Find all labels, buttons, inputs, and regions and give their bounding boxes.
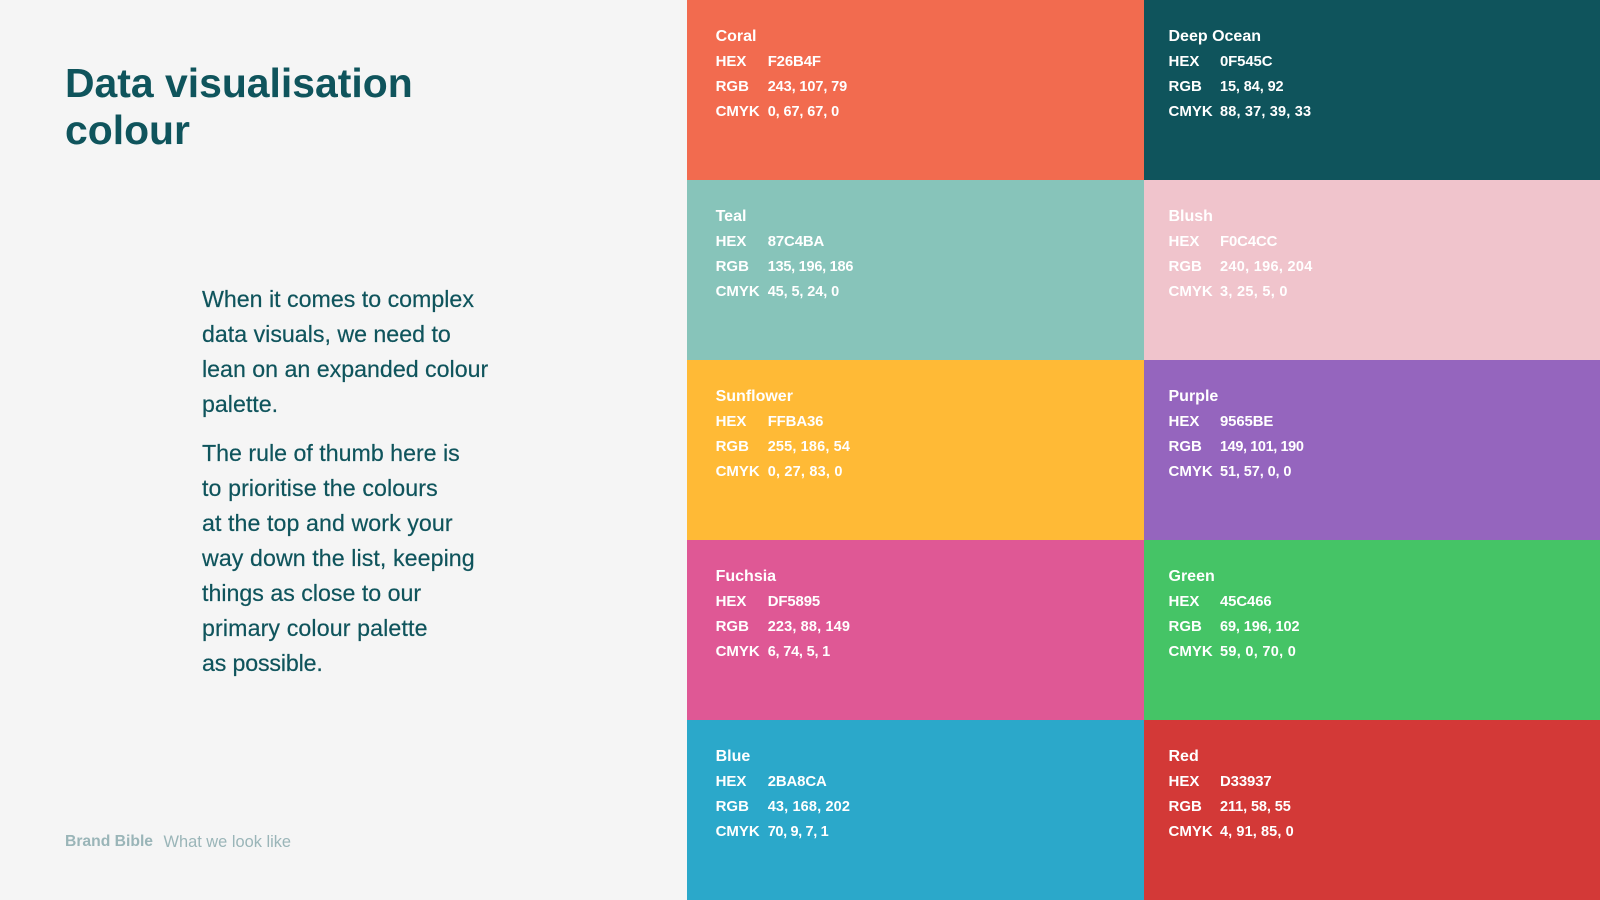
- panel: Coral swatch: CMYK: [716, 103, 760, 120]
- panel: Teal swatch: Teal: [716, 208, 746, 225]
- panel: Fuchsia swatch: [687, 540, 1144, 720]
- panel: Teal swatch: HEX: [716, 233, 746, 250]
- panel: Teal swatch: CMYK: [716, 283, 760, 300]
- panel: Coral swatch: HEX: [716, 53, 746, 70]
- body text: as possible.: [202, 650, 323, 676]
- panel: Purple swatch: [1144, 360, 1600, 540]
- panel: Blush swatch: HEX: [1168, 233, 1199, 250]
- panel: Blue swatch: HEX: [716, 773, 746, 790]
- panel: Sunflower swatch: RGB: [716, 438, 749, 455]
- panel: Purple swatch: CMYK: [1168, 463, 1213, 480]
- title: [65, 60, 413, 153]
- panel: Blue swatch: 70, 9, 7, 1: [768, 824, 828, 840]
- panel: Deep Ocean swatch: 0F545C: [1220, 54, 1272, 70]
- body text: at the top and work your: [202, 510, 453, 536]
- panel: Blush swatch: Blush: [1168, 208, 1213, 225]
- panel: Blush swatch: F0C4CC: [1220, 234, 1277, 250]
- panel: Green swatch: CMYK: [1168, 643, 1213, 660]
- panel: Sunflower swatch: [687, 360, 1144, 540]
- panel: Teal swatch: 45, 5, 24, 0: [768, 284, 839, 300]
- panel: Green swatch: [1144, 540, 1600, 720]
- panel: Red swatch: D33937: [1220, 774, 1272, 790]
- body text: data visuals, we need to: [202, 321, 451, 347]
- panel: Blush swatch: [1144, 180, 1600, 360]
- title: colour: [65, 107, 190, 153]
- panel: Fuchsia swatch: CMYK: [716, 643, 760, 660]
- panel: Blush swatch: CMYK: [1168, 283, 1213, 300]
- panel: Green swatch: 45C466: [1220, 594, 1272, 610]
- panel: Purple swatch: 51, 57, 0, 0: [1220, 464, 1291, 480]
- body text: way down the list, keeping: [202, 545, 475, 571]
- footer: What we look like: [164, 833, 291, 851]
- panel: Sunflower swatch: FFBA36: [768, 414, 823, 430]
- panel: Purple swatch: HEX: [1168, 413, 1199, 430]
- panel: Purple swatch: RGB: [1168, 438, 1202, 455]
- footer: Brand Bible: [65, 833, 153, 850]
- panel: Deep Ocean swatch: HEX: [1168, 53, 1199, 70]
- panel: Sunflower swatch: 0, 27, 83, 0: [768, 464, 843, 480]
- panel: Red swatch: 4, 91, 85, 0: [1220, 824, 1294, 840]
- panel: Deep Ocean swatch: 88, 37, 39, 33: [1220, 104, 1311, 120]
- panel: Coral swatch: [687, 0, 1144, 180]
- panel: Purple swatch: 9565BE: [1220, 414, 1273, 430]
- panel: Fuchsia swatch: DF5895: [768, 594, 820, 610]
- body text: When it comes to complex: [202, 286, 474, 312]
- panel: Blue swatch: 2BA8CA: [768, 774, 827, 790]
- panel: Green swatch: 59, 0, 70, 0: [1220, 644, 1296, 660]
- panel: Deep Ocean swatch: 15, 84, 92: [1220, 79, 1284, 95]
- panel: Blue swatch: [687, 720, 1144, 900]
- panel: Sunflower swatch: Sunflower: [716, 388, 793, 405]
- panel: Deep Ocean swatch: RGB: [1168, 78, 1202, 95]
- panel: Blush swatch: 240, 196, 204: [1220, 259, 1313, 275]
- panel: Coral swatch: 0, 67, 67, 0: [768, 104, 839, 120]
- panel: Deep Ocean swatch: Deep Ocean: [1168, 28, 1261, 45]
- panel: Teal swatch: 87C4BA: [768, 234, 824, 250]
- panel: Fuchsia swatch: Fuchsia: [716, 568, 776, 585]
- body text: to prioritise the colours: [202, 475, 438, 501]
- panel: Red swatch: Red: [1168, 748, 1199, 765]
- panel: Blue swatch: 43, 168, 202: [768, 799, 850, 815]
- panel: Sunflower swatch: CMYK: [716, 463, 760, 480]
- panel: Green swatch: HEX: [1168, 593, 1199, 610]
- panel: Teal swatch: [687, 180, 1144, 360]
- panel: Coral swatch: Coral: [716, 28, 756, 45]
- panel: Green swatch: Green: [1168, 568, 1215, 585]
- body text: The rule of thumb here is: [202, 440, 460, 466]
- panel: Deep Ocean swatch: [1144, 0, 1600, 180]
- panel: Green swatch: RGB: [1168, 618, 1202, 635]
- panel: Teal swatch: RGB: [716, 258, 749, 275]
- panel: Red swatch: RGB: [1168, 798, 1202, 815]
- panel: Blush swatch: RGB: [1168, 258, 1202, 275]
- panel: Coral swatch: 243, 107, 79: [768, 79, 847, 95]
- body text: primary colour palette: [202, 615, 428, 641]
- panel: Fuchsia swatch: HEX: [716, 593, 746, 610]
- panel: Red swatch: CMYK: [1168, 823, 1213, 840]
- footer: [65, 833, 291, 851]
- title: Data visualisation: [65, 60, 413, 106]
- body text: things as close to our: [202, 580, 421, 606]
- body text: lean on an expanded colour: [202, 356, 488, 382]
- panel: Sunflower swatch: 255, 186, 54: [768, 439, 850, 455]
- body text: palette.: [202, 391, 278, 417]
- panel: Blue swatch: Blue: [716, 748, 750, 765]
- panel: Purple swatch: Purple: [1168, 388, 1218, 405]
- panel: Sunflower swatch: HEX: [716, 413, 746, 430]
- panel: Green swatch: 69, 196, 102: [1220, 619, 1299, 635]
- panel: Deep Ocean swatch: CMYK: [1168, 103, 1213, 120]
- panel: Red swatch: [1144, 720, 1600, 900]
- panel: Red swatch: 211, 58, 55: [1220, 799, 1291, 815]
- panel: Blush swatch: 3, 25, 5, 0: [1220, 284, 1288, 300]
- panel: Coral swatch: F26B4F: [768, 54, 821, 70]
- panel: Blue swatch: CMYK: [716, 823, 760, 840]
- panel: Fuchsia swatch: 223, 88, 149: [768, 619, 850, 635]
- panel: Red swatch: HEX: [1168, 773, 1199, 790]
- panel: Fuchsia swatch: RGB: [716, 618, 749, 635]
- panel: Fuchsia swatch: 6, 74, 5, 1: [768, 644, 830, 660]
- panel: Coral swatch: RGB: [716, 78, 749, 95]
- panel: Teal swatch: 135, 196, 186: [768, 259, 853, 275]
- panel: Blue swatch: RGB: [716, 798, 749, 815]
- body text: [202, 286, 488, 676]
- panel: Purple swatch: 149, 101, 190: [1220, 439, 1304, 455]
